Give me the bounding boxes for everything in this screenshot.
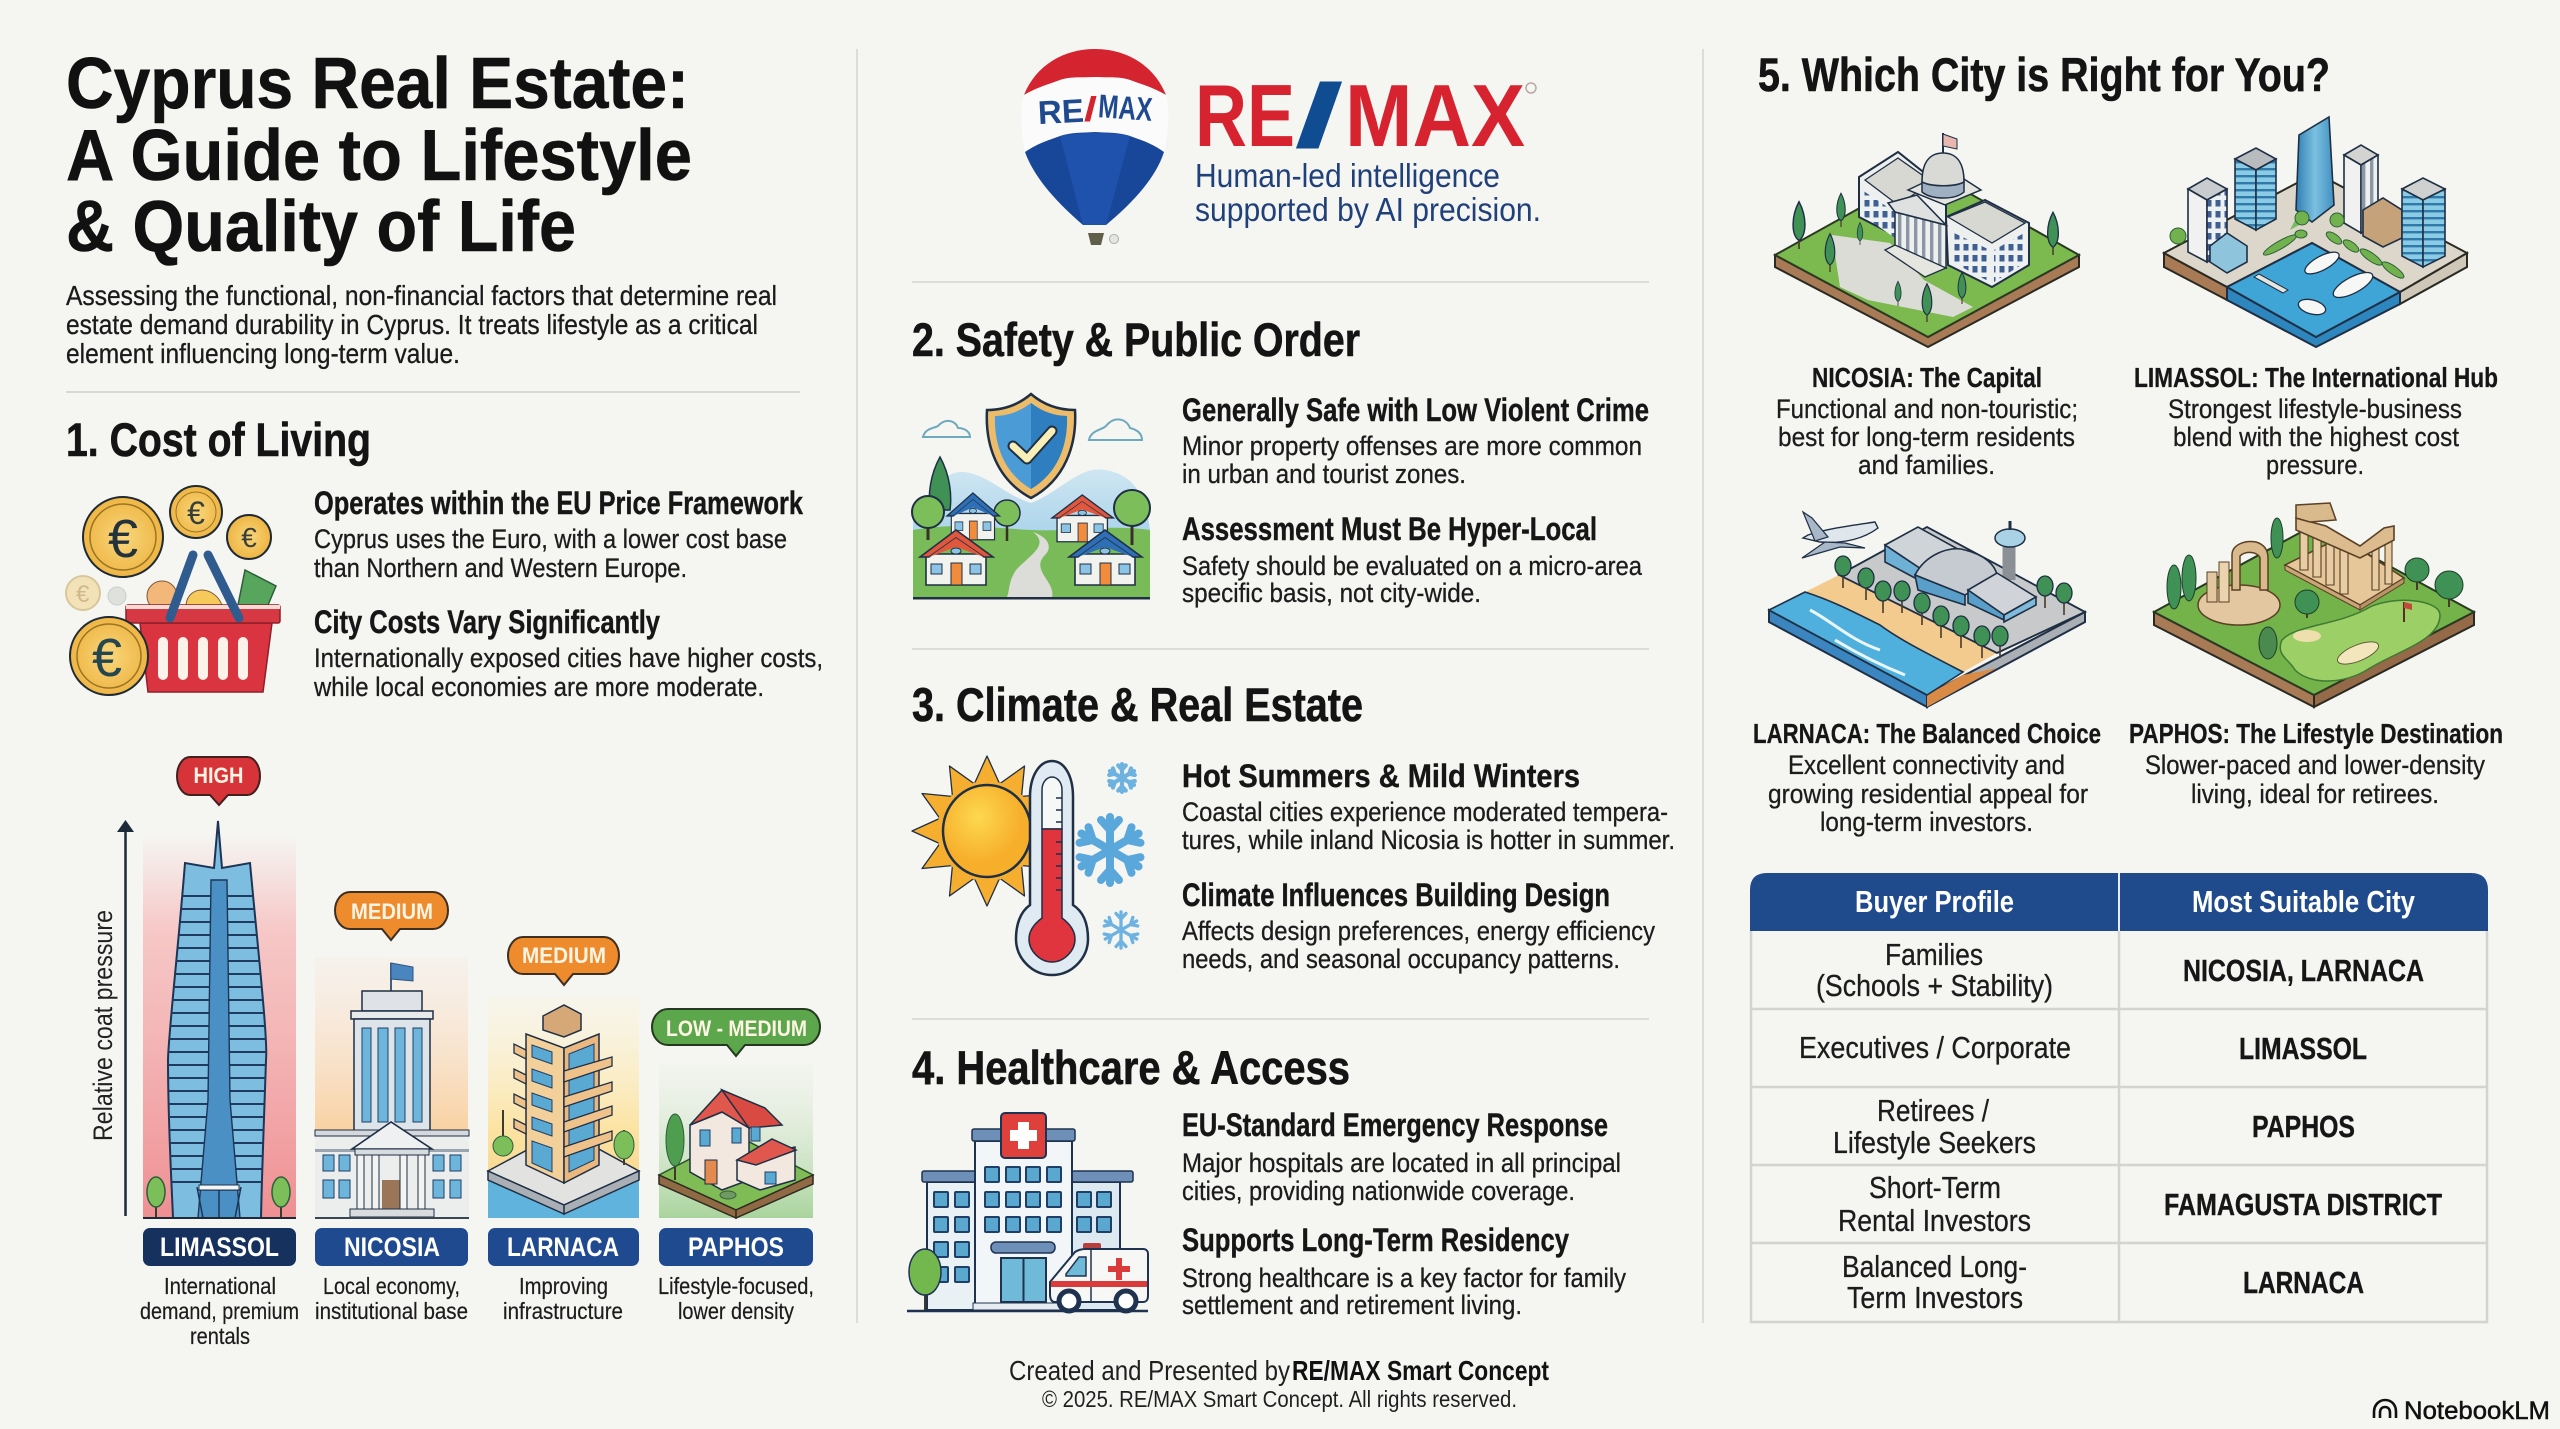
icon: euro coins and shopping basket: €: [76, 581, 90, 608]
icon: Larnaca airport and beach diorama: [1769, 512, 2085, 707]
text: Nicosia: and families.: [1858, 450, 1995, 480]
text: Larnaca: LARNACA: The Balanced Choice: [1753, 718, 2101, 749]
heading: 5. Which City is Right for You?: 5. Which City is Right for You?: [1758, 48, 2330, 101]
heading: 2. Safety & Public Order: 2. Safety & Public Order: [912, 313, 1360, 366]
title: A Guide to Lifestyle: [66, 116, 692, 196]
caption: Limassol: [140, 1273, 299, 1349]
icon: shield over neighbourhood: [912, 394, 1150, 600]
row: balanced investors: [1842, 1249, 2364, 1315]
text: Limassol: pressure.: [2266, 450, 2364, 480]
caption: Nicosia: Local economy,: [323, 1273, 460, 1299]
text: safety points: specific basis, not city-wide.: [1182, 578, 1481, 608]
panel: centre column: [907, 49, 1675, 1412]
row: short-term investors: Short-Term: [1869, 1170, 2001, 1205]
NotebookLM watermark: NotebookLM: [2404, 1397, 2550, 1425]
row: balanced investors: LARNACA: [2243, 1265, 2364, 1300]
caption: Paphos: lower density: [678, 1298, 794, 1324]
bar: Limassol: [143, 821, 296, 1219]
table: buyer profile to city: [1750, 873, 2488, 1322]
text: Nicosia: NICOSIA: The Capital: [1812, 362, 2042, 393]
intro text: estate demand durability in Cyprus. It treats lifestyle as a critical: [66, 309, 758, 340]
text: climate points: tures, while inland Nicosia is hotter in summer.: [1182, 825, 1675, 855]
wordmark: MAX: [1345, 66, 1525, 165]
label: Nicosia: [315, 1228, 468, 1266]
text: cost of living points: Operates within the EU Price Framework: [314, 485, 803, 521]
callout: MEDIUM Larnaca: MEDIUM: [522, 943, 606, 968]
label: Paphos: [659, 1228, 813, 1266]
row: short-term investors: FAMAGUSTA DISTRICT: [2164, 1187, 2442, 1222]
icon: sun, thermometer and snowflakes: [912, 756, 1143, 975]
title: [66, 44, 692, 267]
text: healthcare points: Strong healthcare is a key factor for family: [1182, 1263, 1626, 1293]
text: Larnaca: [1753, 718, 2101, 837]
row: families: NICOSIA, LARNACA: [2183, 953, 2424, 988]
text: Larnaca: long-term investors.: [1820, 807, 2033, 837]
icon: Paphos ruins and golf diorama: [2154, 503, 2474, 707]
title: Cyprus Real Estate:: [66, 44, 689, 124]
intro text: Assessing the functional, non-financial factors that determine real: [66, 280, 777, 311]
text: safety points: [1182, 392, 1649, 608]
icon: euro coins and shopping basket: €: [108, 509, 138, 569]
bar: Nicosia: [315, 957, 469, 1219]
text: climate points: Coastal cities experience moderated tempera-: [1182, 797, 1668, 827]
icon: hospital and ambulance: [907, 1113, 1148, 1311]
text: healthcare points: settlement and retirement living.: [1182, 1290, 1522, 1320]
wordmark: RE: [1195, 66, 1295, 165]
text: safety points: Generally Safe with Low Violent Crime: [1182, 392, 1649, 428]
callout: MEDIUM Nicosia: MEDIUM: [351, 899, 433, 924]
text: cost of living points: while local economies are more moderate.: [313, 672, 764, 702]
icon: hot air balloon: /: [1084, 91, 1098, 129]
label: Paphos: PAPHOS: [688, 1232, 784, 1262]
text: safety points: in urban and tourist zones.: [1182, 459, 1466, 489]
caption: Paphos: [658, 1273, 814, 1324]
icon: euro coins and shopping basket: €: [92, 628, 122, 688]
callout: HIGH: HIGH: [194, 763, 244, 788]
text: Nicosia: Functional and non-touristic;: [1776, 394, 2078, 424]
text: healthcare points: [1182, 1107, 1626, 1320]
text: climate points: Climate Influences Building Design: [1182, 877, 1610, 913]
label: Limassol: LIMASSOL: [160, 1232, 279, 1262]
row: retirees: PAPHOS: [2252, 1109, 2355, 1144]
row: balanced investors: Term Investors: [1847, 1280, 2023, 1315]
text: climate points: Hot Summers & Mild Winters: [1182, 758, 1580, 794]
text: cost of living points: Cyprus uses the Euro, with a lower cost base: [314, 524, 787, 554]
text: safety points: Assessment Must Be Hyper-Local: [1182, 511, 1597, 547]
title: & Quality of Life: [66, 187, 576, 267]
icon: euro coins and shopping basket: €: [241, 522, 257, 553]
label: Larnaca: [488, 1228, 639, 1266]
row: short-term investors: Rental Investors: [1838, 1203, 2031, 1238]
caption: Paphos: Lifestyle-focused,: [658, 1273, 814, 1299]
text: Paphos: [2129, 718, 2503, 809]
tagline: Human-led intelligence: [1195, 157, 1500, 194]
heading: 4. Healthcare & Access: 4. Healthcare & Access: [912, 1041, 1350, 1094]
row: retirees: [1833, 1093, 2355, 1160]
text: healthcare points: Major hospitals are located in all principal: [1182, 1148, 1621, 1178]
intro text: element influencing long-term value.: [66, 338, 460, 369]
callout: LOW-MEDIUM: LOW - MEDIUM: [666, 1016, 807, 1041]
tagline: supported by AI precision.: [1195, 191, 1541, 228]
text: Limassol: Strongest lifestyle-business: [2168, 394, 2462, 424]
axis label: Relative coat pressure: [88, 910, 118, 1141]
row: families: Families: [1885, 937, 1983, 972]
caption: Limassol: rentals: [190, 1323, 250, 1349]
intro text: [66, 280, 777, 369]
footer credit: © 2025. RE/MAX Smart Concept. All rights reserved.: [1042, 1386, 1517, 1412]
text: Larnaca: growing residential appeal for: [1768, 779, 2088, 809]
row: retirees: Retirees /: [1877, 1093, 1989, 1128]
icon: hot air balloon: RE: [1037, 92, 1085, 131]
footer credit: [1009, 1355, 1549, 1412]
row: retirees: Lifestyle Seekers: [1833, 1125, 2036, 1160]
caption: Nicosia: [315, 1273, 468, 1324]
footer credit: RE/MAX Smart Concept: [1292, 1355, 1549, 1386]
caption: Larnaca: Improving: [519, 1273, 608, 1299]
caption: Larnaca: infrastructure: [503, 1298, 623, 1324]
row: families: [1816, 937, 2424, 1003]
footer credit: Created and Presented by: [1009, 1355, 1290, 1386]
label: Nicosia: NICOSIA: [344, 1232, 440, 1262]
column divider left: [856, 49, 858, 1323]
text: cost of living points: City Costs Vary Significantly: [314, 604, 660, 640]
text: cost of living points: [313, 485, 823, 702]
caption: Limassol: International: [164, 1273, 276, 1299]
text: cost of living points: than Northern and Western Europe.: [314, 553, 687, 583]
text: healthcare points: cities, providing nationwide coverage.: [1182, 1176, 1575, 1206]
icon: euro coins and shopping basket: €: [187, 495, 205, 531]
text: climate points: Affects design preferences, energy efficiency: [1182, 916, 1655, 946]
icon: Nicosia capitol diorama: [1775, 133, 2079, 347]
icon: euro coins and shopping basket: [66, 486, 280, 695]
callout: LOW-MEDIUM: [652, 1009, 820, 1056]
text: Nicosia: best for long-term residents: [1778, 422, 2075, 452]
caption: Nicosia: institutional base: [315, 1298, 468, 1324]
table header: Buyer Profile: [1855, 884, 2014, 919]
row: executives: Executives / Corporate: [1799, 1030, 2071, 1065]
wordmark: /: [1296, 66, 1342, 165]
icon: hot air balloon: [1021, 49, 1168, 245]
text: Paphos: Slower-paced and lower-density: [2145, 750, 2485, 780]
bar: Larnaca: [488, 997, 639, 1218]
row: executives: [1799, 1030, 2367, 1066]
row: short-term investors: [1838, 1170, 2442, 1238]
callout: MEDIUM Larnaca: [508, 937, 619, 985]
heading: 1. Cost of Living: 1. Cost of Living: [66, 413, 371, 466]
row: families: (Schools + Stability): [1816, 968, 2053, 1003]
text: healthcare points: EU-Standard Emergency Response: [1182, 1107, 1608, 1143]
tagline: [1195, 157, 1541, 228]
text: Limassol: blend with the highest cost: [2173, 422, 2459, 452]
text: Paphos: living, ideal for retirees.: [2191, 779, 2439, 809]
wordmark: [1195, 66, 1536, 165]
text: climate points: [1182, 758, 1675, 974]
label: Larnaca: LARNACA: [507, 1232, 619, 1262]
text: cost of living points: Internationally exposed cities have higher costs,: [314, 643, 823, 673]
text: safety points: Minor property offenses are more common: [1182, 431, 1642, 461]
panel: right column: [1750, 48, 2503, 1322]
caption: Larnaca: [503, 1273, 623, 1324]
panel: left column: [66, 44, 823, 1349]
chart: relative cost pressure by city: [88, 757, 820, 1349]
icon: hot air balloon: MAX: [1097, 87, 1154, 128]
text: climate points: needs, and seasonal occupancy patterns.: [1182, 944, 1620, 974]
row: balanced investors: Balanced Long-: [1842, 1249, 2027, 1284]
logo: RE/MAX balloon and wordmark: [1021, 49, 1541, 245]
row: executives: LIMASSOL: [2239, 1031, 2367, 1066]
callout: MEDIUM Nicosia: [335, 892, 448, 940]
bar: Paphos: [659, 1064, 813, 1218]
caption: Limassol: demand, premium: [140, 1298, 299, 1324]
table header: [1750, 873, 2488, 931]
text: healthcare points: Supports Long-Term Residency: [1182, 1222, 1569, 1258]
table header: Most Suitable City: [2192, 884, 2416, 919]
column divider right: [1702, 49, 1704, 1323]
heading: 3. Climate & Real Estate: 3. Climate & Real Estate: [912, 678, 1363, 731]
text: Nicosia: [1776, 362, 2078, 480]
text: Larnaca: Excellent connectivity and: [1788, 750, 2065, 780]
axis arrow: [117, 820, 134, 1216]
label: Limassol: [143, 1228, 296, 1266]
icon: Limassol skyline and marina diorama: [2164, 117, 2467, 347]
callout: HIGH: [177, 757, 260, 805]
text: Limassol: [2134, 362, 2498, 480]
text: safety points: Safety should be evaluated on a micro-area: [1182, 551, 1643, 581]
